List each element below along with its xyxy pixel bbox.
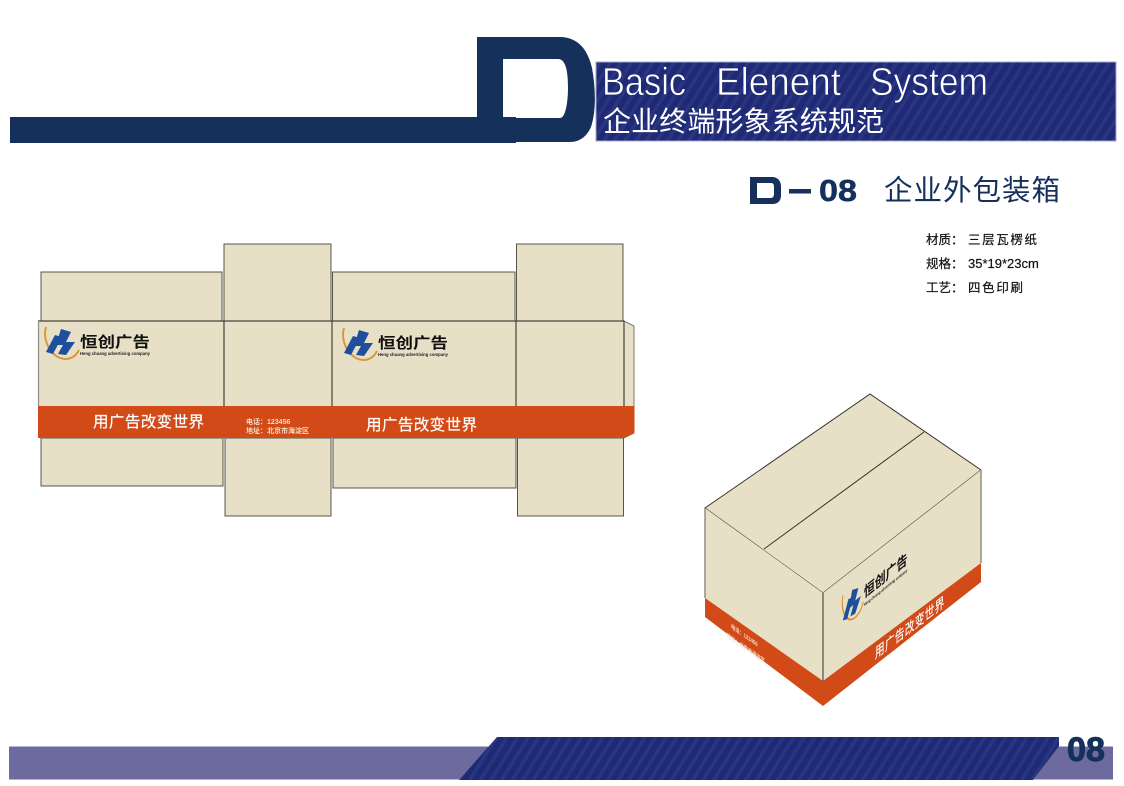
box slogan: 用广告改变世界	[875, 593, 944, 662]
specifications: 工艺：	[926, 281, 964, 295]
top flaps	[41, 244, 623, 321]
heading number: 08	[819, 173, 857, 208]
specifications	[926, 232, 1039, 295]
section heading	[750, 173, 1060, 208]
logo tagline: Heng chuang advertising company	[378, 352, 448, 357]
slogan one: 用广告改变世界	[93, 413, 204, 431]
box edges	[705, 432, 981, 681]
box logo	[842, 543, 908, 628]
logo name: 恒创广告	[80, 333, 150, 351]
specifications: 规格：	[926, 256, 964, 271]
box contact info: 地址：北京市海淀区	[727, 631, 765, 666]
logo name: 恒创广告	[378, 334, 448, 352]
heading D icon	[750, 177, 781, 204]
box contact info: 电话：123456	[731, 622, 758, 649]
banner english title: Elenent	[716, 61, 841, 104]
3D box illustration	[705, 394, 981, 706]
orange band	[38, 406, 634, 438]
specifications: 35*19*23cm	[968, 256, 1039, 271]
large letter D	[477, 37, 595, 142]
logo mark	[842, 579, 863, 628]
footer bar	[9, 746, 1113, 780]
logo mark	[45, 327, 79, 359]
banner english title: Basic	[602, 61, 686, 104]
box top face	[705, 394, 981, 593]
logo name: 恒创广告	[864, 549, 907, 602]
specifications: 材质：	[926, 233, 964, 247]
right band	[823, 563, 981, 706]
logo: panel one	[45, 327, 150, 359]
page number: 08	[1067, 731, 1105, 769]
header banner	[596, 61, 1116, 141]
slogan two: 用广告改变世界	[366, 416, 477, 434]
specifications: 四色印刷	[968, 280, 1023, 295]
logo tagline: Heng chuang advertising company	[80, 351, 150, 356]
header bar	[10, 117, 516, 143]
contact info: 地址：北京市海淀区	[246, 426, 309, 435]
fold lines	[38, 321, 624, 406]
left band	[705, 598, 823, 706]
banner english title: System	[870, 61, 988, 104]
logo: panel two	[343, 328, 448, 360]
box right face	[823, 470, 981, 706]
footer striped band	[459, 737, 1059, 780]
main panels	[38, 321, 624, 407]
banner english title	[602, 61, 988, 104]
logo tagline: Heng chuang advertising company	[864, 567, 908, 608]
footer	[9, 731, 1113, 780]
specifications: 三层瓦楞纸	[968, 232, 1037, 247]
heading dash	[789, 189, 811, 194]
glue tab	[624, 321, 634, 438]
contact info	[246, 417, 309, 435]
box left face	[705, 508, 823, 706]
box dieline	[38, 244, 634, 516]
banner chinese title: 企业终端形象系统规范	[603, 106, 884, 137]
bottom flaps	[41, 438, 624, 516]
contact info: 电话：123456	[246, 417, 290, 426]
logo mark	[343, 328, 377, 360]
heading title: 企业外包装箱	[884, 175, 1060, 207]
